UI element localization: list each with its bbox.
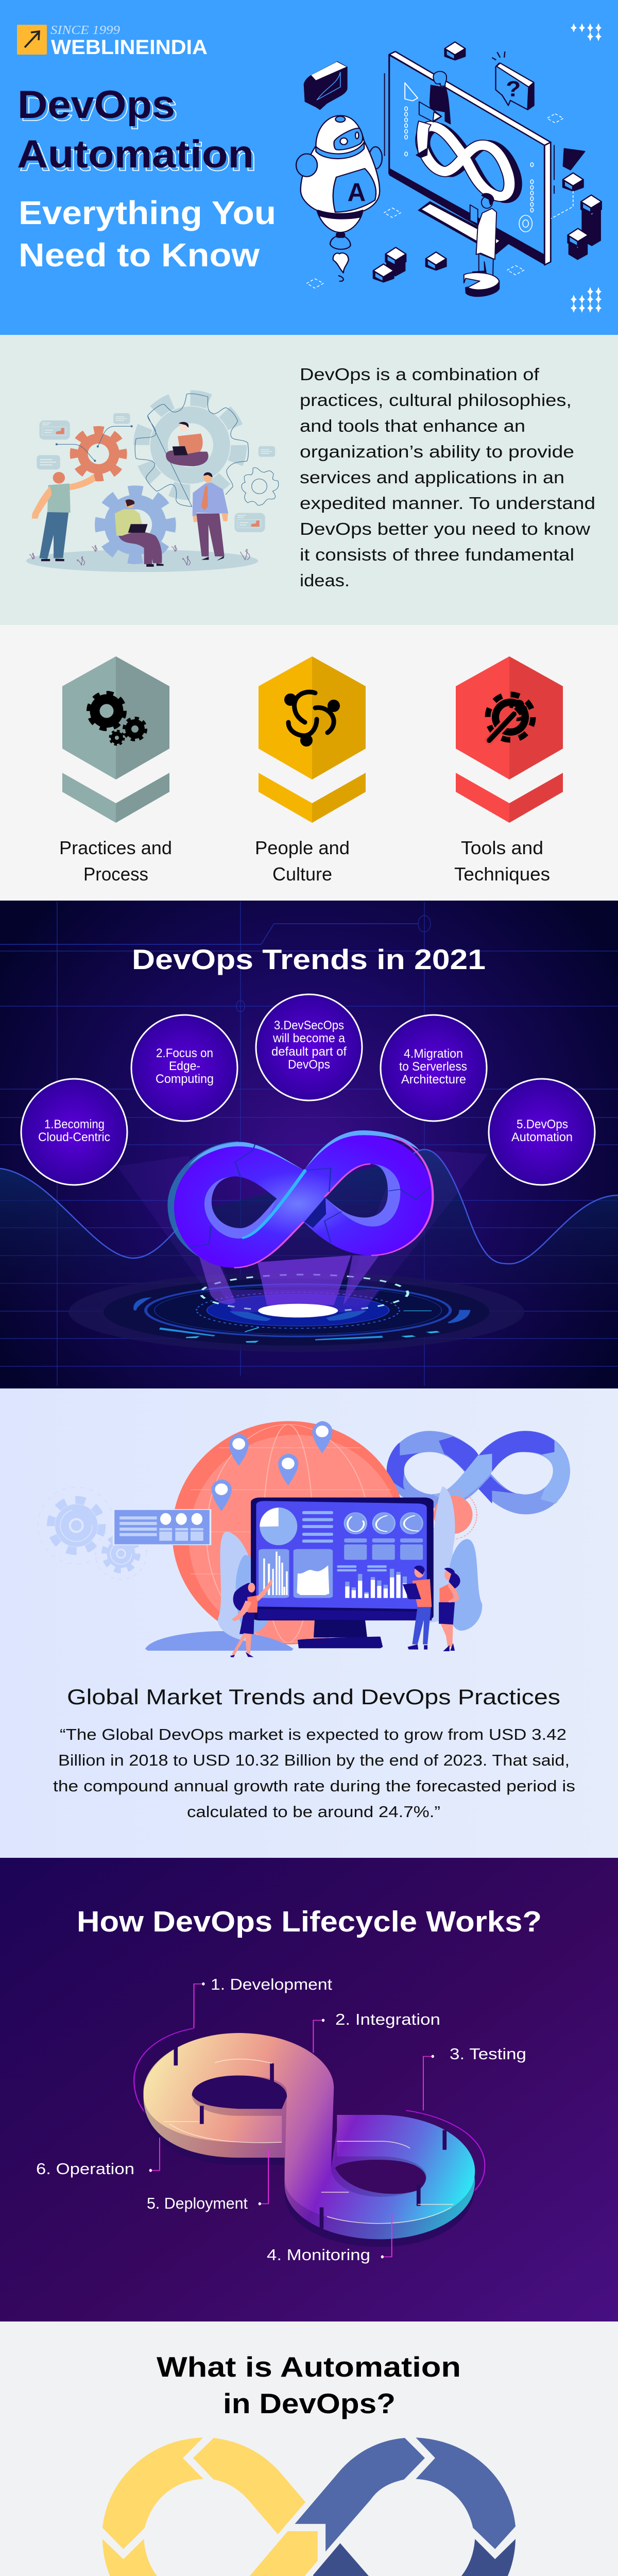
infinity symbol <box>387 1431 570 1514</box>
infinity arrows <box>102 2437 516 2576</box>
ribbon top face <box>144 2033 475 2224</box>
wave line <box>0 1149 618 1319</box>
illustration: globe and dashboard <box>38 1421 570 1657</box>
trend circle 4: Architecture <box>401 1073 466 1087</box>
dashboard pie <box>260 1507 297 1545</box>
trend circle 1 <box>21 1079 127 1185</box>
man with laptop on blue gear <box>115 499 164 567</box>
small plants <box>29 546 250 565</box>
trend circle 3 <box>256 994 362 1100</box>
floating cubes and columns <box>307 42 602 288</box>
connector dots <box>149 1982 434 2258</box>
market quote: Billion in 2018 to USD 10.32 Billion by the end of 2023. That said, <box>58 1751 570 1769</box>
market quote: calculated to be around 24.7%.” <box>187 1803 440 1821</box>
intro paragraph: and tools that enhance an <box>300 416 525 435</box>
connector lines <box>150 1984 433 2257</box>
trend circle 2: 2.Focus on <box>156 1046 213 1060</box>
ground mound <box>145 1631 294 1651</box>
heading: in DevOps? <box>223 2387 396 2419</box>
dashboard bars <box>259 1511 333 1598</box>
white projector light <box>258 1304 338 1317</box>
panel: three fundamental ideas <box>0 625 618 901</box>
robot <box>296 115 382 281</box>
title: DevOps Automation <box>17 83 256 179</box>
title: DevOps Automation: DevOps <box>18 83 175 127</box>
title: DevOps Automation: DevOps <box>20 86 178 129</box>
woman holding gear <box>32 472 96 561</box>
map pins <box>212 1421 332 1511</box>
column: practices and process <box>59 656 172 885</box>
monitor <box>251 1498 434 1648</box>
lifecycle labels: 1. Development <box>211 1975 332 1993</box>
panel: what is automation <box>0 2321 618 2576</box>
infinity ribbon <box>421 126 517 199</box>
trend circle 3: 3.DevSecOps <box>274 1019 344 1032</box>
logo: Weblineindia: WEBLINEINDIA <box>51 36 208 59</box>
trend circle 2: Computing <box>156 1072 214 1086</box>
title: DevOps Automation: Automation <box>20 135 256 179</box>
illustration: team with gears <box>26 394 279 572</box>
man with laptop in big gear <box>166 422 209 466</box>
subtitle: Everything You Need to Know: Everything You <box>19 194 276 231</box>
panel: hero <box>0 0 618 335</box>
dark blue arrows <box>313 2539 516 2576</box>
trend circle 3: will become a <box>272 1031 346 1045</box>
lifecycle labels: 5. Deployment <box>147 2194 248 2212</box>
heading <box>157 2351 461 2419</box>
column: practices and process: Practices and <box>59 837 172 858</box>
trend circle 1: 1.Becoming <box>44 1117 105 1131</box>
trend circle 5: 5.DevOps <box>517 1117 568 1131</box>
panel: DevOps trends in 2021 <box>0 901 618 1388</box>
side data card <box>113 1510 211 1545</box>
lifecycle labels: 6. Operation <box>36 2160 134 2178</box>
column: people and culture: People and <box>255 837 350 858</box>
heading: What is Automation <box>157 2351 461 2383</box>
intro paragraph: practices, cultural philosophies, <box>300 391 572 410</box>
intro paragraph: organization’s ability to provide <box>300 442 574 461</box>
plants <box>218 1486 482 1642</box>
trend circle 4 <box>381 1015 487 1121</box>
doctor with clipboard <box>470 194 496 287</box>
ribbon inner holes <box>192 2076 426 2194</box>
trend circle 3: default part of <box>271 1045 347 1059</box>
icon: gears <box>89 693 146 745</box>
lifecycle labels: 2. Integration <box>335 2010 440 2028</box>
column: people and culture: Culture <box>272 863 332 885</box>
column: tools and techniques <box>454 656 563 885</box>
intro paragraph: it consists of three fundamental <box>300 545 574 564</box>
info cards <box>37 413 275 532</box>
trend circle 5: Automation <box>511 1130 573 1144</box>
faded gear small <box>95 1528 147 1579</box>
question speech bubble <box>492 52 534 110</box>
trend circle 1: Cloud-Centric <box>38 1130 110 1144</box>
blue arrows <box>295 2437 516 2552</box>
woman pointing at dashboard <box>230 1580 273 1657</box>
hologram of infinity <box>68 1130 524 1352</box>
ribbon glow arcs <box>134 2028 485 2195</box>
light beams <box>117 1149 488 1312</box>
yellow arrows <box>102 2437 318 2576</box>
man with clipboard <box>403 1566 432 1650</box>
3D lifecycle infinity <box>134 1982 485 2258</box>
faded gear large <box>38 1487 115 1564</box>
pie chart pedestal <box>464 273 499 296</box>
big gear <box>135 394 248 506</box>
trend circle 4: to Serverless <box>399 1060 467 1074</box>
trend circle 2 <box>131 1015 237 1121</box>
lifecycle labels: 4. Monitoring <box>267 2246 370 2264</box>
robot: A <box>348 178 366 207</box>
intro paragraph: expedited manner. To understand <box>300 494 595 513</box>
column: tools and techniques: Tools and <box>461 837 543 858</box>
trend circle 5 <box>489 1079 595 1185</box>
icon: wrench in gear <box>488 694 533 740</box>
panel: global market trends <box>0 1388 618 1858</box>
chart speech bubble <box>304 61 348 110</box>
market quote: the compound annual growth rate during the forecasted period is <box>53 1777 575 1795</box>
man with tie <box>193 472 228 561</box>
question speech bubble: ? <box>506 76 521 101</box>
heading: Global Market Trends and DevOps Practices <box>67 1685 560 1709</box>
globe <box>172 1421 406 1645</box>
monitor screen <box>389 52 551 265</box>
market quote <box>53 1725 575 1821</box>
lifecycle labels <box>36 1975 526 2264</box>
trend circle 4: 4.Migration <box>404 1047 463 1061</box>
dashboard rings and cards <box>337 1513 423 1598</box>
woman with laptop <box>416 72 450 158</box>
panel: lifecycle <box>0 1858 618 2321</box>
intro paragraph <box>300 365 595 590</box>
lifecycle labels: 3. Testing <box>450 2045 526 2063</box>
subtitle: Everything You Need to Know <box>19 194 276 274</box>
inner walls of the loops <box>204 1164 400 1239</box>
market quote: “The Global DevOps market is expected to grow from USD 3.42 <box>60 1725 566 1743</box>
title: DevOps Automation: Automation <box>17 132 254 176</box>
ribbon segment notches <box>176 2045 444 2229</box>
illustration: robot, monitor and engineers <box>296 42 602 296</box>
title: DevOps Trends in 2021 <box>132 943 486 975</box>
column: practices and process: Process <box>83 863 148 885</box>
ribbon lower wall <box>144 2092 475 2247</box>
monitor stand <box>418 201 509 255</box>
icon: people swirl <box>284 692 340 747</box>
intro paragraph: DevOps better you need to know <box>300 519 590 538</box>
intro paragraph: DevOps is a combination of <box>300 365 540 384</box>
trend circle 2: Edge- <box>169 1059 200 1073</box>
logo: Weblineindia <box>17 24 208 59</box>
blue gear <box>101 492 170 558</box>
ribbon side shade <box>144 2033 475 2239</box>
title: How DevOps Lifecycle Works? <box>77 1905 542 1938</box>
column: people and culture <box>255 656 366 885</box>
panel: introduction <box>0 335 618 625</box>
woman with hand on hip <box>439 1568 460 1651</box>
3D infinity symbol <box>167 1130 433 1268</box>
decorative sparkle dots <box>571 23 602 313</box>
hologram disc <box>68 1272 524 1352</box>
orange gear <box>56 425 133 477</box>
trend circle 3: DevOps <box>288 1058 330 1072</box>
intro paragraph: services and applications in an <box>300 468 564 487</box>
logo: Weblineindia: SINCE 1999 <box>50 24 120 37</box>
subtitle: Everything You Need to Know: Need to Know <box>19 236 260 274</box>
orange circle <box>430 1490 477 1539</box>
column: tools and techniques: Techniques <box>454 863 550 885</box>
small outline gear <box>242 468 279 505</box>
intro paragraph: ideas. <box>300 571 350 590</box>
